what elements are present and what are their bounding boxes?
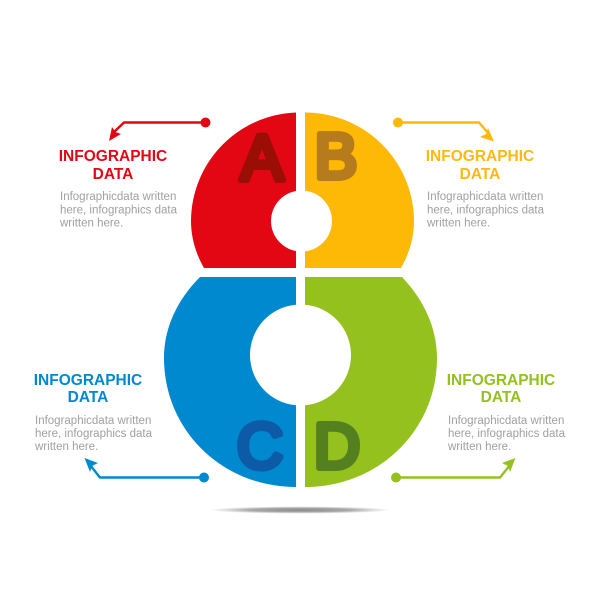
body C: here, infographics data: [35, 428, 153, 440]
letter A: A: [241, 122, 284, 194]
body C: written here.: [34, 441, 98, 453]
heading C: DATA: [68, 389, 108, 406]
arrow: green connector: [391, 458, 516, 482]
heading D: DATA: [481, 389, 521, 406]
body D: Infographicdata written: [448, 415, 564, 427]
body A: Infographicdata written: [60, 191, 176, 203]
body B: Infographicdata written: [427, 191, 543, 203]
segment A: red: [191, 112, 296, 268]
letter B: B: [315, 120, 357, 192]
arrow: red connector: [109, 118, 210, 141]
arrow: blue connector: [84, 458, 209, 482]
body C: Infographicdata written: [35, 415, 151, 427]
segment D: green: [305, 277, 437, 487]
body A: here, infographics data: [60, 204, 178, 216]
text block: B: [426, 148, 545, 230]
letter D: D: [314, 410, 360, 482]
heading A: DATA: [93, 166, 133, 183]
drop shadow: [210, 506, 390, 514]
letter C: C: [237, 410, 283, 482]
heading C: INFOGRAPHIC: [34, 372, 142, 389]
heading A: INFOGRAPHIC: [59, 148, 167, 165]
body B: here, infographics data: [427, 204, 545, 216]
segment C: blue: [164, 277, 296, 487]
body D: written here.: [447, 441, 511, 453]
text block: A: [59, 148, 178, 230]
arrow: yellow connector: [393, 118, 494, 142]
heading B: DATA: [460, 166, 500, 183]
text block: C: [34, 372, 153, 453]
text block: D: [447, 372, 566, 453]
body B: written here.: [426, 218, 490, 230]
body D: here, infographics data: [448, 428, 566, 440]
body A: written here.: [59, 218, 123, 230]
segment B: yellow: [305, 112, 414, 268]
heading D: INFOGRAPHIC: [447, 372, 555, 389]
heading B: INFOGRAPHIC: [426, 148, 534, 165]
